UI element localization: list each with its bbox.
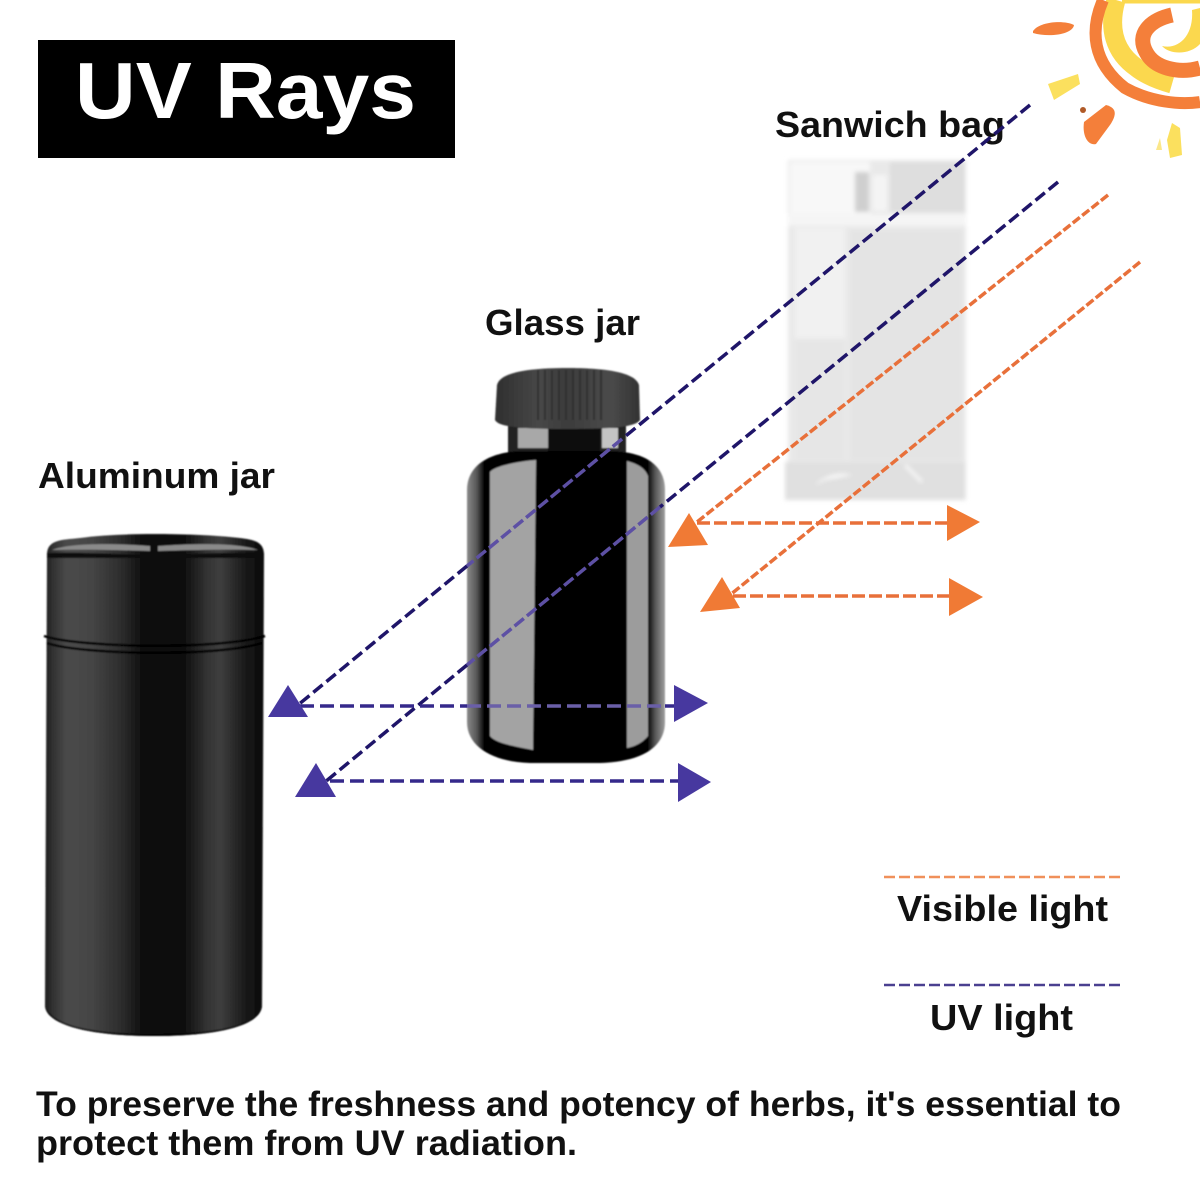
label: aluminum jar: Aluminum jar: [38, 455, 275, 496]
icon: sun: [1033, 0, 1200, 158]
jar neck: [508, 425, 626, 457]
orange arrowheads: [668, 505, 983, 616]
label: glass jar: Glass jar: [485, 302, 640, 343]
image: glass jar: [467, 368, 665, 763]
visible light rays: [697, 195, 1140, 596]
image: sandwich bag: [785, 160, 966, 500]
jar seam: [44, 636, 265, 653]
legend: visible light: Visible light: [897, 888, 1108, 929]
UV light rays: [298, 105, 1058, 782]
caption: To preserve the freshness and potency of herbs, it's essential to: [36, 1085, 1121, 1124]
image: aluminum jar: [44, 534, 265, 1036]
jar body: [45, 534, 264, 1036]
legend: UV light: UV light: [930, 997, 1073, 1038]
purple arrowheads: [268, 685, 711, 802]
jar lid top: [47, 544, 264, 558]
jar body: [467, 451, 665, 763]
title banner: UV Rays: [75, 46, 416, 135]
caption: [36, 1085, 1121, 1163]
jar cap: [495, 368, 640, 429]
jar base shadow: [45, 1005, 262, 1036]
caption: protect them from UV radiation.: [36, 1124, 577, 1163]
title banner: [38, 40, 455, 158]
label: sandwich bag: Sanwich bag: [775, 104, 1005, 145]
